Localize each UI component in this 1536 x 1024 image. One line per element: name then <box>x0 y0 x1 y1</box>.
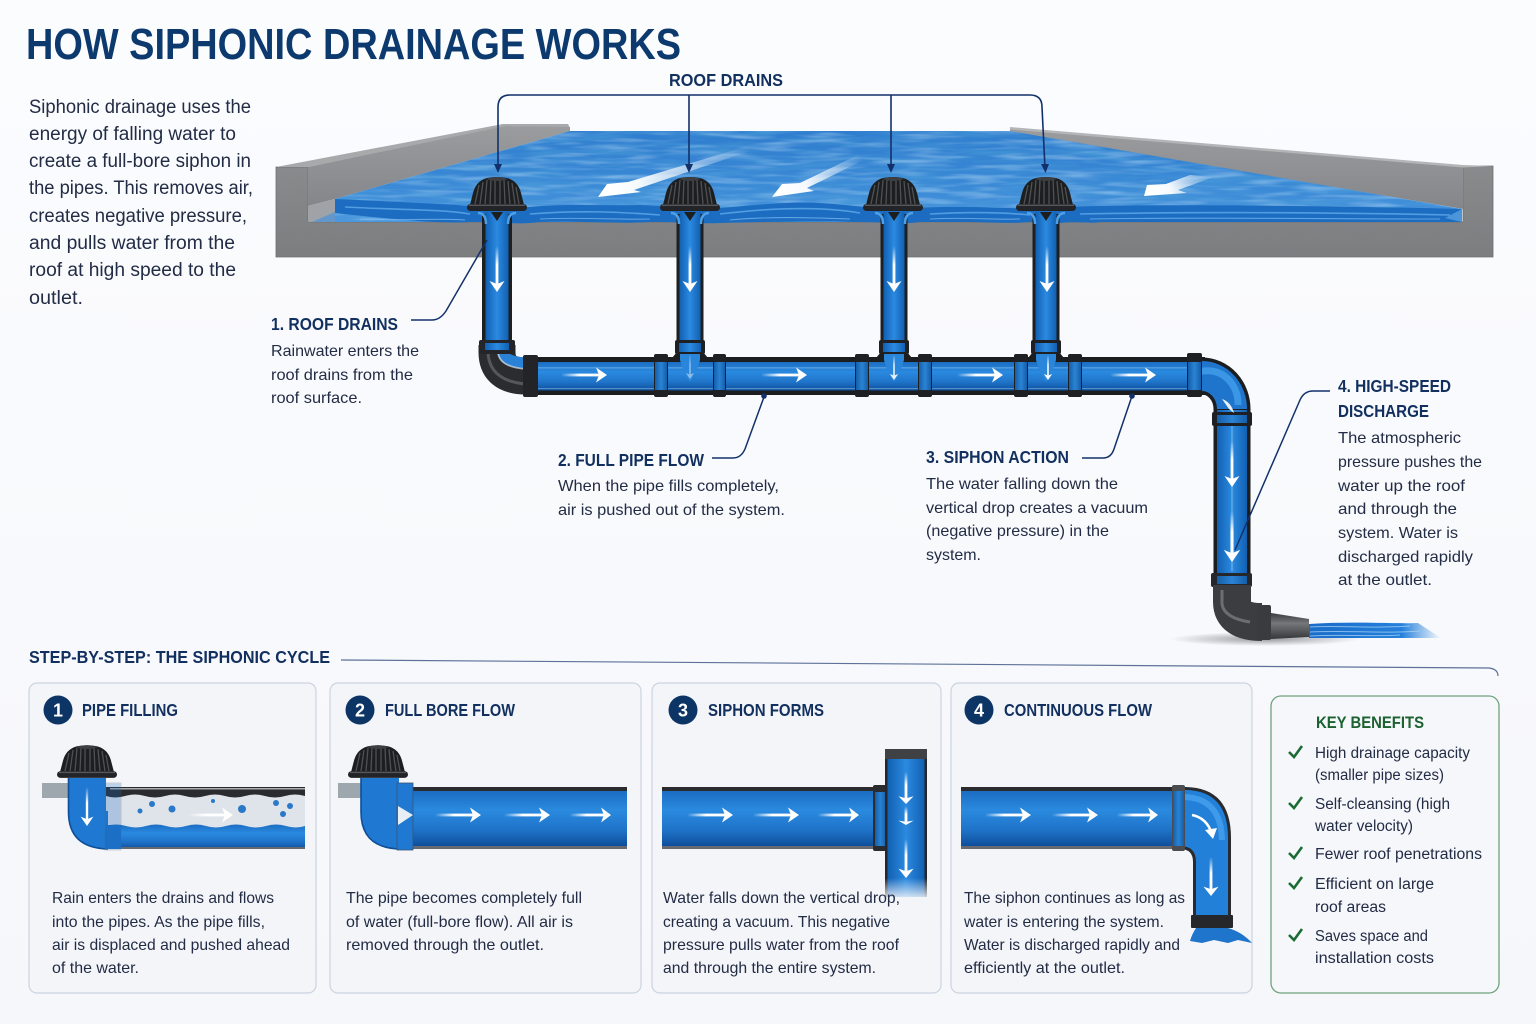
step 2 text: of water (full-bore flow). All air is <box>346 914 573 931</box>
step 4 number <box>964 696 994 724</box>
step 1 number: 1 <box>53 700 63 720</box>
intro text block: energy of falling water to <box>29 124 236 145</box>
callout 3: siphon action <box>926 393 1148 564</box>
step 3 illustration <box>662 749 928 901</box>
step 2 heading: FULL BORE FLOW <box>385 700 515 720</box>
intro text block: and pulls water from the <box>29 233 235 254</box>
concrete slab <box>276 124 1494 258</box>
callout 3: siphon action: (negative pressure) in the <box>926 523 1109 540</box>
benefits list <box>1314 745 1482 967</box>
panel: step 3 siphon forms <box>652 683 941 993</box>
step 3 text: Water falls down the vertical drop, <box>663 890 900 907</box>
benefits list: installation costs <box>1315 950 1434 967</box>
callout 4: high-speed discharge <box>1235 376 1482 589</box>
callout 1: roof drains: 1. ROOF DRAINS <box>271 314 398 334</box>
water surface <box>330 128 1465 224</box>
benefits list: (smaller pipe sizes) <box>1315 767 1444 784</box>
drain pipe 2 <box>671 212 709 347</box>
step 1 illustration <box>42 745 305 850</box>
callout 3: siphon action: vertical drop creates a vacuum <box>926 500 1148 517</box>
callout 1: roof drains <box>271 240 487 407</box>
panel: key benefits <box>1271 696 1499 993</box>
step 3 text: pressure pulls water from the roof <box>663 937 900 954</box>
step 4 illustration <box>961 785 1252 943</box>
callout 3: siphon action: system. <box>926 547 981 564</box>
step 3 number: 3 <box>678 700 688 720</box>
benefits list: Saves space and <box>1315 928 1428 945</box>
step 4 heading: CONTINUOUS FLOW <box>1004 700 1152 720</box>
step 2 text: removed through the outlet. <box>346 937 544 954</box>
callout 4: high-speed discharge: water up the roof <box>1337 478 1466 495</box>
flow arrows in pipes <box>490 246 1240 562</box>
step 2 number: 2 <box>355 700 365 720</box>
step 4 text: efficiently at the outlet. <box>964 960 1125 977</box>
step 1 text: into the pipes. As the pipe fills, <box>52 914 265 931</box>
callout 3: siphon action: 3. SIPHON ACTION <box>926 447 1069 467</box>
callout 1: roof drains: roof drains from the <box>271 367 413 384</box>
callout 4: high-speed discharge: DISCHARGE <box>1338 401 1429 421</box>
benefits list: Fewer roof penetrations <box>1315 846 1482 863</box>
callout 4: high-speed discharge: and through the <box>1338 501 1457 518</box>
callout 4: high-speed discharge: The atmospheric <box>1338 430 1461 447</box>
piping system <box>467 177 1441 646</box>
drain pipe 3 <box>875 212 913 347</box>
pipe couplings <box>479 340 1252 587</box>
callout 1: roof drains: Rainwater enters the <box>271 343 419 360</box>
step 4 text: The siphon continues as long as <box>964 890 1185 907</box>
step 3 number <box>668 696 698 724</box>
title: HOW SIPHONIC DRAINAGE WORKS <box>26 20 681 69</box>
roof drain 2 <box>660 177 720 211</box>
flow arrows on roof <box>598 146 1214 197</box>
intro text block <box>29 97 253 309</box>
panel: step 4 continuous flow <box>951 683 1252 993</box>
step 1 text: of the water. <box>52 960 139 977</box>
roof drains label with bracket: ROOF DRAINS <box>669 70 783 90</box>
callout 2: full pipe flow: 2. FULL PIPE FLOW <box>558 450 704 470</box>
drain pipe 1 <box>478 212 516 344</box>
section heading <box>29 647 1498 676</box>
callout 4: high-speed discharge: at the outlet. <box>1338 572 1432 589</box>
intro text block: the pipes. This removes air, <box>29 178 253 199</box>
step 1 text <box>52 890 290 977</box>
callout 4: high-speed discharge: 4. HIGH-SPEED <box>1338 376 1451 396</box>
tee junctions <box>672 350 1064 382</box>
drain pipe 4 <box>1027 212 1065 347</box>
benefits checkmarks <box>1289 746 1302 940</box>
callout 2: full pipe flow: When the pipe fills completely, <box>558 478 779 495</box>
step 1 text: air is displaced and pushed ahead <box>52 937 290 954</box>
roof drains label with bracket <box>494 70 1049 173</box>
step 4 number: 4 <box>974 700 984 720</box>
section heading: STEP-BY-STEP: THE SIPHONIC CYCLE <box>29 647 330 667</box>
benefits list: Efficient on large <box>1315 876 1434 893</box>
intro text block: outlet. <box>29 288 83 309</box>
roof drain 4 <box>1016 177 1076 211</box>
step 2 text <box>346 890 582 954</box>
intro text block: Siphonic drainage uses the <box>29 97 251 118</box>
intro text block: creates negative pressure, <box>29 206 247 227</box>
panel: step 1 pipe filling <box>29 683 316 993</box>
benefits list: Self-cleansing (high <box>1315 796 1450 813</box>
roof slab with water <box>276 124 1494 258</box>
main horizontal pipe <box>525 357 1205 395</box>
benefits list: roof areas <box>1315 899 1386 916</box>
step 4 text <box>963 890 1185 977</box>
benefits list: High drainage capacity <box>1315 745 1470 762</box>
benefits heading: KEY BENEFITS <box>1316 713 1424 732</box>
step 3 text <box>663 890 900 977</box>
step 1 number <box>44 696 72 724</box>
step 1 text: Rain enters the drains and flows <box>52 890 274 907</box>
callout 1: roof drains: roof surface. <box>271 390 362 407</box>
step 4 text: Water is discharged rapidly and <box>964 937 1180 954</box>
benefits list: water velocity) <box>1314 818 1413 835</box>
roof drain 3 <box>863 177 923 211</box>
left elbow <box>488 345 526 384</box>
outlet <box>1170 585 1441 646</box>
callout 2: full pipe flow: air is pushed out of the system. <box>558 502 785 519</box>
right elbow and vertical drop <box>1196 371 1247 580</box>
step 3 text: and through the entire system. <box>663 960 876 977</box>
callout 2: full pipe flow <box>558 393 785 519</box>
step 3 text: creating a vacuum. This negative <box>663 914 890 931</box>
callout 3: siphon action: The water falling down the <box>926 476 1118 493</box>
callout 4: high-speed discharge: discharged rapidly <box>1338 549 1473 566</box>
step 2 illustration <box>338 745 627 850</box>
intro text block: create a full-bore siphon in <box>29 151 251 172</box>
callout 4: high-speed discharge: pressure pushes the <box>1338 454 1482 471</box>
panel: step 2 full bore flow <box>330 683 641 993</box>
roof drain 1 <box>467 177 527 211</box>
step 2 number <box>346 696 374 724</box>
step 3 heading: SIPHON FORMS <box>708 700 824 720</box>
callout 4: high-speed discharge: system. Water is <box>1338 525 1458 542</box>
intro text block: roof at high speed to the <box>29 260 236 281</box>
step 1 heading: PIPE FILLING <box>82 700 178 720</box>
step 4 text: water is entering the system. <box>963 914 1164 931</box>
step 2 text: The pipe becomes completely full <box>346 890 582 907</box>
